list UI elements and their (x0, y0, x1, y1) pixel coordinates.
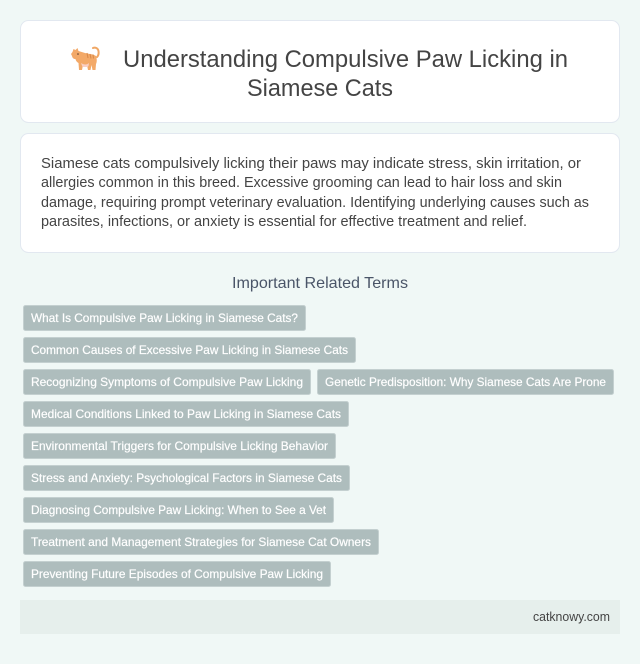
footer (20, 600, 620, 634)
text block: description (41, 156, 589, 230)
tag: Common Causes of Excessive Paw Licking in Siamese Cats (31, 343, 348, 357)
heading: related terms: Important Related Terms (232, 275, 408, 292)
tag (24, 338, 356, 362)
text block: description: damage, requiring prompt veterinary evaluation. Identifying underlying causes such as (41, 195, 589, 211)
icon: cat (71, 48, 99, 70)
tag (24, 306, 306, 330)
tag (24, 562, 330, 586)
tag (24, 466, 350, 490)
title (123, 46, 568, 102)
tag: Environmental Triggers for Compulsive Licking Behavior (31, 439, 328, 453)
tag: Preventing Future Episodes of Compulsive Paw Licking (31, 567, 323, 581)
tag: Treatment and Management Strategies for Siamese Cat Owners (31, 535, 371, 549)
tag: Stress and Anxiety: Psychological Factors in Siamese Cats (31, 471, 342, 485)
tag: Recognizing Symptoms of Compulsive Paw Licking (31, 375, 303, 389)
tag (318, 370, 614, 394)
tag (24, 530, 378, 554)
panel: title card (20, 20, 620, 122)
tag (24, 370, 310, 394)
tag: Medical Conditions Linked to Paw Licking in Siamese Cats (31, 407, 341, 421)
text block: description: parasites, infections, or anxiety is essential for effective treatment and relief. (41, 214, 527, 230)
panel: description (20, 134, 620, 252)
tag (24, 434, 336, 458)
tag: Diagnosing Compulsive Paw Licking: When to See a Vet (31, 503, 327, 517)
panel: related term tags (24, 306, 614, 586)
tag: What Is Compulsive Paw Licking in Siamese Cats? (31, 311, 298, 325)
footer: catknowy.com (533, 610, 610, 624)
tag (24, 402, 348, 426)
title: Understanding Compulsive Paw Licking in (123, 46, 568, 73)
text block: description: Siamese cats compulsively licking their paws may indicate stress, skin irritation, or (41, 156, 581, 172)
text block: description: allergies common in this breed. Excessive grooming can lead to hair loss and skin (41, 175, 562, 191)
tag (24, 498, 334, 522)
tag: Genetic Predisposition: Why Siamese Cats Are Prone (325, 375, 606, 389)
title: Siamese Cats (247, 75, 393, 102)
